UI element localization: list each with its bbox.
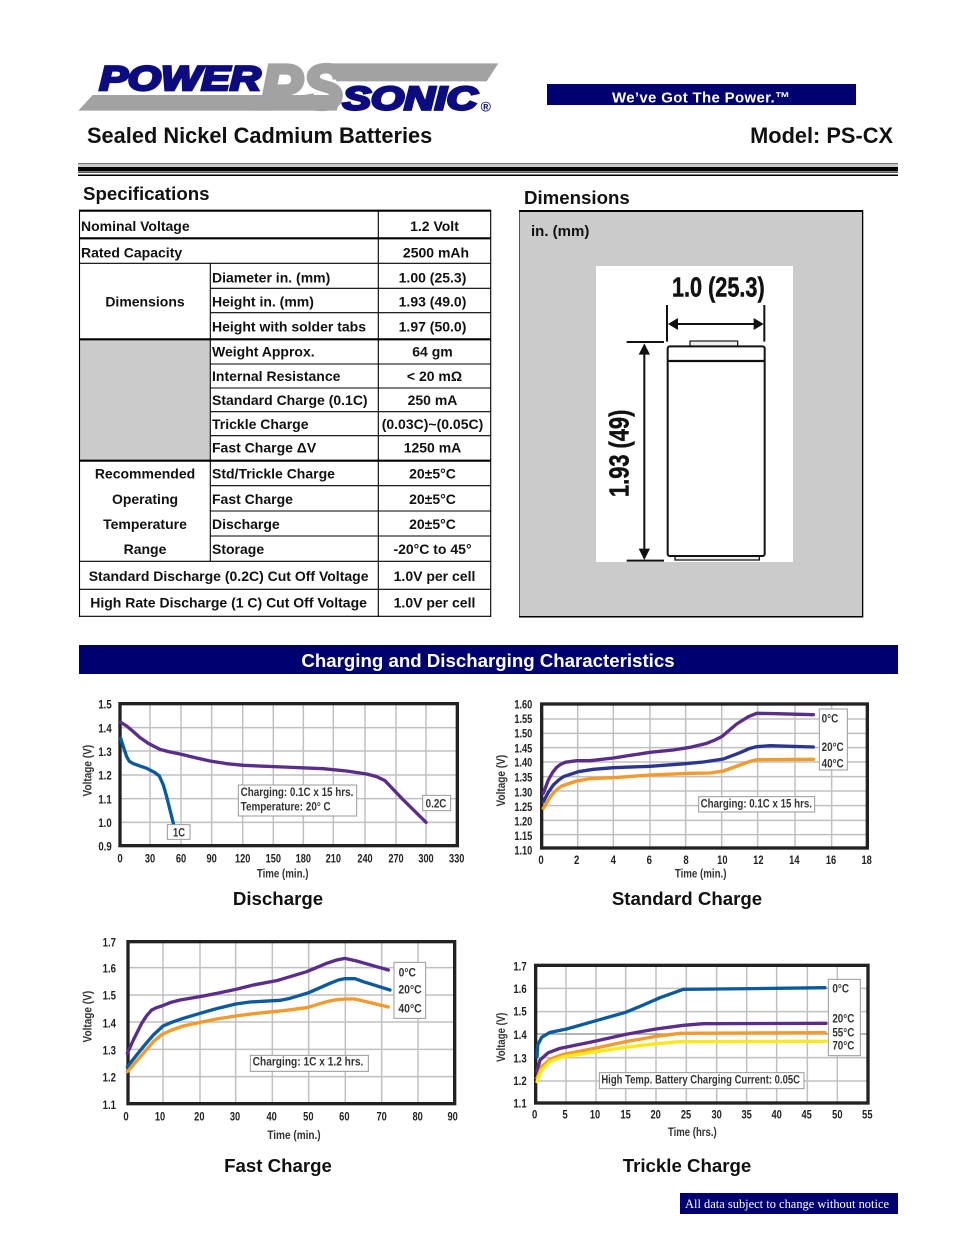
- panel: specifications table: 1.0V per cell: [394, 568, 475, 584]
- slogan banner: We’ve Got The Power.™: [612, 90, 790, 106]
- x axis labels: 330: [449, 851, 465, 865]
- panel: specifications table: [79, 210, 491, 617]
- curve: 0°C: [127, 958, 388, 1053]
- y axis labels: 1.40: [514, 756, 533, 770]
- panel: specifications table: Height in. (mm): [212, 294, 314, 310]
- x axis labels: 10: [590, 1107, 600, 1121]
- curve: 1C: [121, 738, 173, 823]
- curve: 20°C: [537, 1023, 826, 1072]
- x axis labels: 40: [266, 1110, 277, 1124]
- y axis labels: 1.2: [98, 769, 112, 783]
- x axis labels: 80: [412, 1110, 423, 1124]
- panel: specifications table: 2500 mAh: [403, 244, 469, 260]
- panel: specifications table: Std/Trickle Charge: [212, 466, 335, 482]
- label: 0.2C: 0.2C: [426, 796, 447, 810]
- curve: 20°C: [543, 746, 813, 802]
- panel: specifications table: Fast Charge ΔV: [212, 440, 317, 456]
- x axis labels: [117, 851, 465, 865]
- panel: specifications table: 64 gm: [412, 344, 453, 360]
- panel: specifications table: 20±5°C: [409, 466, 456, 482]
- curve: 40°C: [543, 759, 813, 808]
- chart caption: discharge: Discharge: [233, 888, 323, 909]
- y axis title: Voltage (V): [82, 745, 95, 796]
- y axis labels: 1.6: [103, 961, 116, 975]
- curve: 0.2C: [121, 722, 426, 822]
- title: Sealed Nickel Cadmium Batteries: [87, 123, 432, 148]
- heading: specifications: Specifications: [83, 183, 210, 204]
- x axis labels: 40: [771, 1107, 782, 1121]
- logo: Power-Sonic: POWER: [99, 60, 261, 98]
- panel: specifications table: Nominal Voltage: [81, 218, 190, 234]
- panel: specifications table: 20±5°C: [409, 491, 456, 507]
- section banner: charging and discharging: Charging and Discharging Characteristics: [301, 650, 675, 671]
- panel: specifications table: -20°C to 45°: [393, 541, 472, 557]
- y axis title: Voltage (V): [495, 755, 508, 806]
- x axis labels: 240: [357, 851, 373, 865]
- label: 1C: 1C: [173, 826, 185, 840]
- legend: temperatures: 20°C: [398, 982, 422, 996]
- x axis labels: 6: [647, 853, 652, 867]
- x axis labels: 90: [447, 1110, 458, 1124]
- y axis labels: 1.5: [103, 989, 116, 1003]
- curve: 40°C: [127, 999, 388, 1072]
- x axis labels: 35: [741, 1107, 752, 1121]
- y axis labels: 1.30: [514, 785, 533, 799]
- x axis labels: 180: [296, 851, 311, 865]
- panel: specifications table: Trickle Charge: [212, 416, 309, 432]
- x axis labels: 60: [339, 1110, 350, 1124]
- chart: fast charge: [82, 935, 458, 1142]
- y axis labels: [514, 697, 533, 858]
- x axis labels: 30: [711, 1107, 722, 1121]
- y axis labels: 1.2: [103, 1071, 116, 1085]
- note: charging current: High Temp. Battery Charging Current: 0.05C: [601, 1072, 800, 1086]
- panel: specifications table: 1250 mA: [404, 440, 461, 456]
- panel: specifications table: Operating: [112, 491, 178, 507]
- y axis labels: 1.15: [514, 829, 533, 843]
- legend: temperatures: 20°C: [832, 1012, 855, 1026]
- y axis labels: 1.3: [513, 1051, 527, 1065]
- x axis labels: [532, 1107, 873, 1121]
- y axis labels: 1.4: [103, 1016, 116, 1030]
- diagram: battery drawing: [596, 266, 793, 562]
- panel: dimensions: in. (mm): [531, 223, 589, 240]
- x axis labels: 270: [388, 851, 404, 865]
- y axis labels: 1.55: [514, 712, 533, 726]
- y axis labels: 0.9: [98, 840, 112, 854]
- note: charging conditions: Charging: 0.1C x 15 hrs.: [241, 785, 353, 799]
- note: charging conditions: Temperature: 20° C: [241, 800, 331, 814]
- x axis labels: 20: [650, 1107, 661, 1121]
- x axis labels: 300: [418, 851, 434, 865]
- legend: temperatures: 0°C: [822, 711, 839, 725]
- x axis labels: 20: [194, 1110, 205, 1124]
- legend: temperatures: [394, 962, 426, 1018]
- x axis labels: 18: [861, 853, 872, 867]
- x axis labels: 14: [789, 853, 800, 867]
- panel: specifications table: Rated Capacity: [81, 244, 182, 260]
- x axis labels: 90: [206, 851, 217, 865]
- slogan banner: [547, 84, 856, 106]
- curve: 70°C: [537, 1041, 826, 1082]
- y axis labels: 1.20: [514, 814, 533, 828]
- x axis labels: 120: [235, 851, 251, 865]
- panel: specifications table: Diameter in. (mm): [212, 269, 330, 285]
- panel: specifications table: 1.00 (25.3): [399, 269, 466, 285]
- panel: specifications table: Range: [124, 541, 167, 557]
- y axis labels: 1.45: [514, 741, 533, 755]
- x axis title: Time (min.): [257, 867, 309, 880]
- x axis labels: 70: [376, 1110, 387, 1124]
- y axis labels: [513, 960, 527, 1110]
- label: 1C: [167, 825, 190, 840]
- curve: 0°C: [537, 988, 825, 1057]
- legend: temperatures: 20°C: [822, 740, 844, 754]
- diagram: battery drawing: 1.93 (49): [603, 410, 634, 497]
- x axis labels: 2: [574, 853, 580, 867]
- y axis labels: 1.7: [513, 960, 527, 974]
- chart caption: trickle charge: Trickle Charge: [623, 1155, 751, 1176]
- y axis labels: 1.25: [514, 800, 533, 814]
- x axis labels: 55: [862, 1107, 873, 1121]
- curve: 55°C: [537, 1033, 825, 1078]
- note: charging conditions: [238, 785, 357, 816]
- panel: specifications table: Internal Resistance: [212, 368, 341, 384]
- panel: specifications table: Fast Charge: [212, 491, 293, 507]
- diagram: battery drawing: 1.0 (25.3): [672, 272, 765, 303]
- x axis labels: 210: [326, 851, 341, 865]
- logo: Power-Sonic: ®: [481, 98, 492, 114]
- x axis labels: 25: [681, 1107, 691, 1121]
- chart: discharge: [82, 697, 465, 880]
- panel: specifications table: 1.93 (49.0): [399, 294, 466, 310]
- x axis labels: 0: [532, 1107, 538, 1121]
- x axis title: Time (hrs.): [668, 1126, 717, 1139]
- x axis title: Time (min.): [267, 1129, 321, 1142]
- legend: temperatures: [828, 979, 860, 1056]
- legend: temperatures: 40°C: [398, 1002, 422, 1016]
- legend: temperatures: 0°C: [832, 982, 849, 996]
- note: charging conditions: Charging: 1C x 1.2 hrs.: [253, 1055, 363, 1069]
- x axis labels: 10: [155, 1110, 165, 1124]
- x axis labels: 30: [145, 851, 155, 865]
- x axis labels: 16: [826, 853, 836, 867]
- logo: Power-Sonic: SONIC: [343, 79, 478, 116]
- panel: specifications table: Temperature: [103, 516, 187, 532]
- chart: standard charge: [495, 697, 872, 881]
- y axis labels: 1.10: [514, 844, 533, 858]
- x axis labels: 150: [266, 851, 281, 865]
- panel: specifications table: 20±5°C: [409, 516, 456, 532]
- x axis labels: [538, 853, 872, 867]
- footer notice: All data subject to change without notice: [685, 1197, 889, 1211]
- legend: temperatures: 40°C: [822, 756, 844, 770]
- y axis labels: [98, 697, 112, 854]
- legend: temperatures: 55°C: [832, 1026, 855, 1040]
- panel: dimensions: [519, 210, 863, 618]
- panel: specifications table: Standard Charge (0.1C): [212, 392, 368, 408]
- x axis labels: 10: [717, 853, 728, 867]
- panel: specifications table: 250 mA: [408, 392, 457, 408]
- x axis labels: 15: [620, 1107, 631, 1121]
- panel: specifications table: 1.97 (50.0): [399, 319, 466, 335]
- curve: 0°C: [543, 713, 813, 793]
- y axis labels: 1.1: [103, 1098, 116, 1112]
- logo: Power-Sonic: [78, 54, 498, 123]
- x axis labels: 0: [538, 853, 544, 867]
- y axis labels: [103, 935, 116, 1112]
- y axis labels: 1.50: [514, 726, 533, 740]
- panel: specifications table: Dimensions: [105, 294, 185, 310]
- panel: specifications table: Recommended: [95, 466, 195, 482]
- y axis labels: 1.7: [103, 935, 116, 949]
- y axis labels: 1.6: [513, 982, 527, 996]
- curve: 20°C: [127, 979, 390, 1067]
- y axis labels: 1.60: [514, 697, 533, 711]
- y axis labels: 1.0: [98, 816, 112, 830]
- x axis labels: 30: [230, 1110, 240, 1124]
- heading: dimensions: Dimensions: [524, 187, 630, 208]
- y axis labels: 1.4: [513, 1028, 527, 1042]
- y axis labels: 1.4: [98, 721, 112, 735]
- footer notice: [680, 1193, 898, 1214]
- y axis labels: 1.1: [98, 792, 112, 806]
- chart caption: fast charge: Fast Charge: [224, 1155, 332, 1176]
- x axis labels: 8: [683, 853, 689, 867]
- x axis labels: 5: [562, 1107, 568, 1121]
- legend: temperatures: 70°C: [832, 1038, 855, 1052]
- x axis labels: [123, 1110, 458, 1124]
- x axis labels: 0: [117, 851, 123, 865]
- panel: specifications table: < 20 mΩ: [407, 368, 462, 384]
- panel: specifications table: Height with solder tabs: [212, 319, 366, 335]
- note: charging conditions: Charging: 0.1C x 15 hrs.: [701, 796, 812, 810]
- model: Model: PS-CX: [750, 123, 893, 148]
- x axis labels: 50: [832, 1107, 843, 1121]
- x axis labels: 0: [123, 1110, 129, 1124]
- chart caption: standard charge: Standard Charge: [612, 888, 762, 909]
- x axis labels: 4: [611, 853, 616, 867]
- panel: specifications table: 1.2 Volt: [410, 218, 459, 234]
- x axis labels: 50: [303, 1110, 314, 1124]
- y axis labels: 1.3: [103, 1044, 116, 1058]
- logo: Power-Sonic: PS: [261, 54, 344, 123]
- panel: specifications table: Weight Approx.: [212, 344, 315, 360]
- chart: trickle charge: [495, 960, 873, 1139]
- legend: temperatures: 0°C: [399, 966, 416, 980]
- panel: specifications table: 1.0V per cell: [394, 595, 475, 611]
- x axis labels: 45: [801, 1107, 812, 1121]
- y axis labels: 1.5: [98, 697, 112, 711]
- panel: specifications table: (0.03C)~(0.05C): [382, 416, 483, 432]
- y axis title: Voltage (V): [82, 991, 95, 1042]
- x axis labels: 12: [753, 853, 764, 867]
- x axis title: Time (min.): [675, 868, 727, 881]
- y axis title: Voltage (V): [495, 1013, 508, 1062]
- legend: temperatures: [819, 709, 847, 770]
- panel: specifications table: Discharge: [212, 516, 280, 532]
- panel: specifications table: Storage: [212, 541, 264, 557]
- y axis labels: 1.35: [514, 770, 533, 784]
- y axis labels: 1.3: [98, 745, 112, 759]
- y axis labels: 1.2: [513, 1074, 527, 1088]
- x axis labels: 60: [176, 851, 186, 865]
- panel: specifications table: High Rate Discharge (1 C) Cut Off Voltage: [90, 595, 367, 611]
- section banner: charging and discharging: [79, 645, 898, 674]
- y axis labels: 1.1: [513, 1096, 527, 1110]
- panel: specifications table: Standard Discharge (0.2C) Cut Off Voltage: [89, 568, 369, 584]
- y axis labels: 1.5: [513, 1005, 527, 1019]
